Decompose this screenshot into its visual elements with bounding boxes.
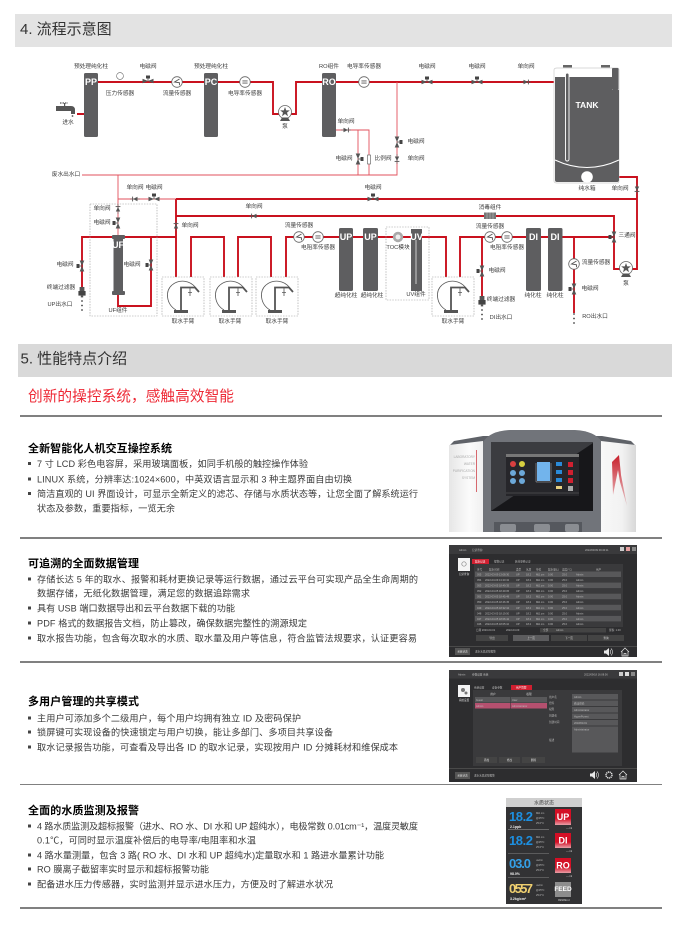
data table rows: Admin [576,578,584,582]
data table rows: UP [516,572,520,576]
data table rows: Admin [576,606,584,610]
data table rows: 25.0 [562,578,568,582]
readout: RO water [508,856,572,878]
data table rows: MΩ.cm [536,584,544,588]
screenshot: data record screen: 累积: 1.00 [609,628,621,632]
data table rows: UP [516,589,520,593]
data table rows: 050 [477,600,482,604]
diagram labels: 压力传感器 [106,89,135,97]
diagram labels: 电导率传感器 [347,62,381,70]
screenshot: user management screen: 修改 [507,758,512,762]
screenshot: data record screen: 水质 [526,568,532,572]
diagram labels: 单向阀 [337,117,355,125]
data table rows: UP [516,622,520,626]
readout: DI water: DI [558,836,568,846]
diagram labels: 流量传感器 [163,89,192,97]
screenshot: user management screen: 系统状态 [457,774,468,778]
diagram labels: 电磁阀 [468,62,486,70]
readout: feed water: FEED [554,886,572,893]
readout: feed water: us/cm [536,883,543,887]
bullet list: 状态及参数，重要指标，一览无余 [37,502,175,514]
diagram labels: 单向阀 [407,154,425,162]
purification columns: UV [410,232,423,242]
purification columns [84,73,562,295]
diagram labels: TOC模块 [386,243,410,251]
screenshot: data record screen: 记录查询 [459,572,470,576]
divider lines [20,415,662,909]
data table rows: 18.2 [526,600,532,604]
diagram labels: DI出水口 [490,313,512,321]
diagram labels: 电磁阀 [407,137,425,145]
diagram labels: 流量传感器 [476,222,505,230]
diagram labels [47,62,636,325]
bullet list: 取水报告功能，包含每次取水的水质、取水量及用户等信息，符合监管法规要求，认证更容易 [37,632,417,644]
screenshot: user management screen: 删除 [531,758,536,762]
block heading: 多用户管理的共享模式 [28,694,139,708]
data table rows: 2022-03-05 18:49:35 [485,584,510,588]
purification columns: UF [112,240,124,250]
data table rows: Admin [576,617,584,621]
screenshot: data record screen: 上一页 [527,636,535,640]
data table rows: 2022-03-05 18:32:34 [485,606,510,610]
screenshot: data record screen: 序号 [477,568,483,572]
data table rows: 2022-03-05 18:06:42 [485,617,510,621]
bullet list: 4 路水质监测及超标报警（进水、RO 水、DI 水和 UP 超纯水），电极常数 0.01cm⁻¹，温度灵敏度 [37,820,418,832]
pure water tank: TANK [576,100,599,110]
heading bar: 4. 流程示意图 [15,14,672,47]
readout: feed water: 0557 [509,881,533,896]
screenshot: user management screen: 添加 [484,758,490,762]
data table rows: 18.2 [526,572,532,576]
user table: Guest [476,698,483,702]
diagram labels: 电磁阀 [581,284,599,292]
screenshot: data record screen: 进水水质超限报警 [475,650,496,654]
diagram labels: 电阻率传感器 [490,243,524,251]
diagram labels: 超纯化柱 [335,291,358,299]
data table rows: UP [516,584,520,588]
screenshot: user management screen: 用户管理 [516,686,527,690]
diagram labels: 取水手臂 [219,317,242,325]
feature block: water quality monitoring [28,803,418,890]
diagram labels: 单向阀 [181,221,199,229]
readout: DI water: 18.2 [509,833,533,848]
user form: Admin [574,695,582,699]
purification columns: RO [322,77,336,87]
screenshot: data record screen: 温度(°C) [562,568,572,572]
data table rows: 2022-03-05 18:05:10 [485,622,510,626]
diagram labels: 电磁阀 [418,62,436,70]
data table rows: 053 [477,584,482,588]
data table rows: 18.2 [526,622,532,626]
readout: UP water: MΩ.cm [536,811,544,815]
diagram labels: 单向阀 [93,204,111,212]
data table rows: MΩ.cm [536,617,544,621]
data table rows: MΩ.cm [536,589,544,593]
screenshot: data record screen: 用户 [596,568,602,572]
user form [549,694,618,752]
user form: Administrator [574,728,589,732]
screenshot: user management screen: Admin [458,672,466,676]
readout: DI water: ---ml [566,849,572,853]
data table rows: 051 [477,595,482,599]
user table [475,697,547,709]
dashed boxes: UF and UV assemblies [90,204,429,316]
data table rows: Admin [576,600,584,604]
diagram labels: 消毒组件 [479,203,502,211]
data table rows: 18.2 [526,606,532,610]
data table rows: 0.00 [548,589,554,593]
data table rows: 054 [477,578,482,582]
screenshot: data record screen: 系统状态 [457,650,468,654]
readout: feed water: @25°C [536,888,545,892]
diagram labels: 取水手臂 [442,317,465,325]
user table: Admin [476,704,484,708]
diagram labels: 电导率传感器 [228,89,262,97]
diagram labels: RO出水口 [582,312,608,320]
bullet list: 取水记录报告功能，可查看及导出各 ID 的取水记录，实现按用户 ID 分摊耗材和维保成本 [37,742,398,752]
readout: UP water: UP [557,812,569,822]
data table rows: 0.00 [548,600,554,604]
image: device touch panel: PURIFICATION [453,469,476,473]
user table: User [512,698,518,702]
data table rows: UP [516,600,520,604]
readout: feed water: 3.2kg/cm² [510,897,527,901]
readout: RO water: 25.0°C [536,868,544,872]
bullet list: 简洁直观的 UI 界面设计，可显示全新定义的滤芯、存储与水质状态等，让您全面了解系统运行 [37,488,418,499]
image: device touch panel: WATER [464,462,476,466]
user form: 修改密码 [574,702,585,706]
data table rows: 25.0 [562,595,568,599]
diagram labels: 比例阀 [374,154,392,162]
process flow diagram [47,62,639,325]
data table rows: MΩ.cm [536,578,544,582]
bullet list: 具有 USB 端口数据导出和云平台数据下载的功能 [37,602,235,614]
data table rows: 18.2 [526,578,532,582]
screenshot: data record screen: 取水记录 [475,560,486,564]
image: device touch panel: SYSTEM [462,476,475,480]
block heading: 可追溯的全面数据管理 [28,556,139,570]
data table rows: 2022-03-09 13:20:32 [485,578,510,582]
block heading: 全新智能化人机交互操控系统 [28,441,172,455]
data table rows: Admin [576,622,584,626]
readout: feed water [509,881,572,902]
diagram labels: 纯化柱 [524,291,542,299]
user form: 描述 [549,738,555,742]
diagram labels: 单向阀 [611,184,629,192]
bullet list: 0.1℃，可同时显示温度补偿后的电导率/电阻率和水温 [37,834,256,846]
readout: RO water: ---ml [566,874,572,878]
purification columns: PP [85,77,97,87]
bullet list: 数据存储，无纸化数据管理，满足您的数据追踪需求 [37,588,250,598]
data table rows: Admin [576,584,584,588]
water dispensing arms [162,277,474,316]
screenshot: user management screen: 进水水质超限报警 [474,774,495,778]
data table rows: 0.00 [548,611,554,615]
image: device touch panel: LABORATORY [454,455,476,459]
data table rows: MΩ.cm [536,572,544,576]
purification columns: DI [550,232,560,242]
diagram labels: UF组件 [109,306,128,314]
heading bar: 4. 流程示意图: 4. 流程示意图 [20,20,112,38]
readout: feed water: 25.0°C [536,893,544,897]
bullet list [28,574,418,644]
user table: Administrator [512,704,527,708]
screenshot: data record screen: 单位 [536,568,542,572]
readout: DI water: @25°C [536,840,545,844]
diagram labels: 纯水箱 [578,184,596,192]
user form: 用户名 [549,695,557,699]
data table rows: 25.0 [562,589,568,593]
screenshot: data record screen: 下一页 [565,636,573,640]
diagram labels: 电磁阀 [145,183,163,191]
diagram labels: 电磁阀 [488,266,506,274]
screenshot: data record screen: 取水量(L) [548,568,559,572]
diagram labels: 电磁阀 [123,260,141,268]
diagram labels: 超纯化柱 [361,291,384,299]
data table rows: MΩ.cm [536,600,544,604]
data table rows: 2022-03-09 13:08:30 [485,572,510,576]
data table rows: 047 [477,617,482,621]
bullet list: 存储长达 5 年的取水、报警和耗材更换记录等运行数据，通过云平台可实现产品全生命周期的 [37,574,418,584]
data table rows: 25.0 [562,617,568,621]
data table rows: 25.0 [562,600,568,604]
screenshot: data record screen: 取水时间 [489,568,500,572]
bullet list: LINUX 系统，分辨率达:1024×600，中英双语言显示和 3 种主题界面自由切换 [37,474,352,484]
purification columns: PC [205,77,218,87]
icon: water inlet faucet [56,103,75,117]
screenshot: data record screen: 报警记录 [494,560,505,564]
data table rows: UP [516,611,520,615]
readout: UP water: 18.2 [509,809,533,824]
diagram labels: 取水手臂 [172,317,195,325]
data table rows: 0.00 [548,584,554,588]
bullet list: 主用户可添加多个二级用户，每个用户均拥有独立 ID 及密码保护 [37,712,301,724]
readout: feed water: 99999ml [558,898,570,902]
purification columns: UP [340,232,352,242]
screenshot: user management screen [449,670,637,782]
data table rows: 18.2 [526,595,532,599]
diagram labels: 电磁阀 [56,260,74,268]
user form: HyperPurest [574,714,589,718]
data table rows: 25.0 [562,584,568,588]
data table rows: 0.00 [548,622,554,626]
screenshot: water status panel [506,798,582,904]
data table rows: 046 [477,622,482,626]
diagram labels: 电磁阀 [335,154,353,162]
data table rows: Admin [576,589,584,593]
data table rows: 25.0 [562,611,568,615]
screenshot: user management screen: 系统设置 [459,698,470,702]
data table rows: 048 [477,611,482,615]
diagram labels: UP出水口 [48,300,72,308]
diagram labels: 终端过滤器 [487,295,516,303]
readout: UP water: 25.0°C [536,821,544,825]
data table rows: 2022-03-05 18:46:35 [485,600,510,604]
data table rows: UP [516,617,520,621]
data table rows: MΩ.cm [536,622,544,626]
screenshot: user management screen: 系统设置 [474,686,485,690]
screenshot: user management screen: 设备参数 [492,686,503,690]
diagram labels: RO组件 [319,62,339,70]
screenshot: user management screen: 用户 [490,692,496,696]
screenshot: data record screen: 2022/03/09 09:40:11 [585,548,609,552]
red water pipes [77,82,637,313]
data table rows: MΩ.cm [536,606,544,610]
readout: DI water: 25.0°C [536,845,544,849]
screenshot: user management screen: 权限 [526,692,532,696]
pure water tank [554,65,619,183]
screenshot: user management screen: 参数设置 系统 [472,672,489,676]
diagram labels: 单向阀 [245,202,263,210]
diagram labels: 单向阀 [126,183,144,191]
bullet list: 配备进水压力传感器，实时监测并显示进水压力，方便及时了解进水状况 [37,878,333,890]
screenshot: data record screen: 类型 [516,568,522,572]
readout: RO water: us/cm [536,858,543,862]
readout: UP water: 2.1ppb [510,825,521,829]
data table rows [475,572,621,626]
data table rows: MΩ.cm [536,595,544,599]
readout: DI water [508,833,572,854]
data table rows: Admin [576,572,584,576]
screenshot: data record screen: 2022-03-09 [506,628,520,632]
screenshot: data record screen: 记录查询 [472,548,483,552]
data table rows: Admin [576,595,584,599]
diagram labels: 单向阀 [517,62,535,70]
screenshot: data record screen: 耗材更换记录 [515,560,531,564]
screenshot: user management screen: 2022/09/18 16:08:56 [584,672,608,676]
diagram labels: 泵 [623,280,629,287]
user form: 2018/01/01 [574,721,588,725]
screenshot: data record screen: 全部 [543,628,549,632]
screenshot: water status panel: 水质状态 [534,800,554,806]
screenshot: data record screen: Admin [556,628,564,632]
data table rows: Admin [576,611,584,615]
data table rows: 055 [477,572,482,576]
bullet list: 锁屏键可实现设备的快速锁定与用户切换，能让多部门、多项目共享设备 [37,726,333,738]
diagram labels: 进水 [62,118,74,126]
data table rows: MΩ.cm [536,611,544,615]
purification columns: UP [364,232,377,242]
diagram labels: 电磁阀 [139,62,157,70]
heading bar: 5. 性能特点介绍 [18,344,672,377]
diagram labels: 取水手臂 [266,317,289,325]
readout: DI water: MΩ.cm [536,835,544,839]
feature block: touch control system [28,441,418,514]
diagram labels: 预处理纯化柱 [194,62,228,70]
readout: RO water: 98.0% [510,872,521,876]
diagram labels: 泵 [282,123,288,130]
readout: UP water: ---ml [566,826,572,830]
readout: RO water: @25°C [536,863,545,867]
data table rows: 18.2 [526,611,532,615]
valves and sensors [76,73,639,324]
data table rows: 049 [477,606,482,610]
heading bar: 5. 性能特点介绍: 5. 性能特点介绍 [20,350,127,368]
user form: 创建者 [549,714,557,718]
image: device touch panel [449,430,636,532]
screenshot: data record screen: 日期 2020-03-01 [476,628,496,632]
bullet list [28,712,398,752]
data table rows: 25.0 [562,622,568,626]
diagram labels: UV组件 [406,290,426,298]
diagram labels: 预处理纯化柱 [74,62,108,70]
data table rows: 052 [477,589,482,593]
data table rows: 0.00 [548,617,554,621]
bullet list: RO 膜离子截留率实时显示和超标报警功能 [37,864,209,874]
data table rows: 2022-03-05 18:19:50 [485,611,510,615]
data table rows: 25.0 [562,606,568,610]
diagram labels: 纯化柱 [546,291,564,299]
diagram labels: 电阻率传感器 [301,243,335,251]
readout: UP water: @25°C [536,816,545,820]
diagram labels: 电磁阀 [93,218,111,226]
block heading: 全面的水质监测及报警 [28,803,139,817]
diagram labels: 流量传感器 [285,221,314,229]
data table rows: 0.00 [548,578,554,582]
diagram labels: 终端过滤器 [47,283,76,291]
user form: 创建时间 [549,720,560,724]
feature block: data management [28,556,418,644]
data table rows: 0.00 [548,606,554,610]
data table rows: 18.2 [526,584,532,588]
bullet list [28,458,418,514]
data table rows: 18.2 [526,589,532,593]
screenshot: data record screen [449,545,637,657]
data table rows: 25.0 [562,572,568,576]
bullet list: PDF 格式的数据报告文档，防止篡改，确保数据完整性的溯源规定 [37,618,307,628]
readout: RO water: RO [556,860,570,870]
screenshot: data record screen: Admin [459,548,467,552]
feature block: multi-user management [28,694,398,752]
data table rows: UP [516,578,520,582]
data table rows: 0.00 [548,595,554,599]
diagram labels: 三通阀 [618,231,636,239]
data table rows: UP [516,606,520,610]
readout: RO water: 03.0 [509,856,531,871]
screenshot: data record screen: 导出 [489,636,495,640]
screenshot: data record screen: 查询 [603,636,609,640]
user form: 权限 [549,707,555,711]
diagram labels: 废水出水口 [52,170,80,178]
user form: Administrator [574,708,589,712]
diagram labels: 流量传感器 [582,258,611,266]
bullet list [28,820,418,890]
bullet list: 7 寸 LCD 彩色电容屏，采用玻璃面板，如同手机般的触控操作体验 [37,458,308,469]
purification columns: DI [529,232,538,242]
data table rows: 0.00 [548,572,554,576]
red section title: 创新的操控系统，感触高效智能 [28,387,234,405]
diagram labels: 电磁阀 [364,183,382,191]
readout: UP water [508,809,572,830]
data table rows: 2022-03-05 18:49:05 [485,589,510,593]
data table rows: UP [516,595,520,599]
user form: 密码 [549,701,555,705]
bullet list: 4 路水量测量，包含 3 路( RO 水、DI 水和 UP 超纯水)定量取水和 1 路进水量累计功能 [37,850,384,860]
data table rows: 18.2 [526,617,532,621]
data table rows: 2022-03-05 18:45:49 [485,595,510,599]
